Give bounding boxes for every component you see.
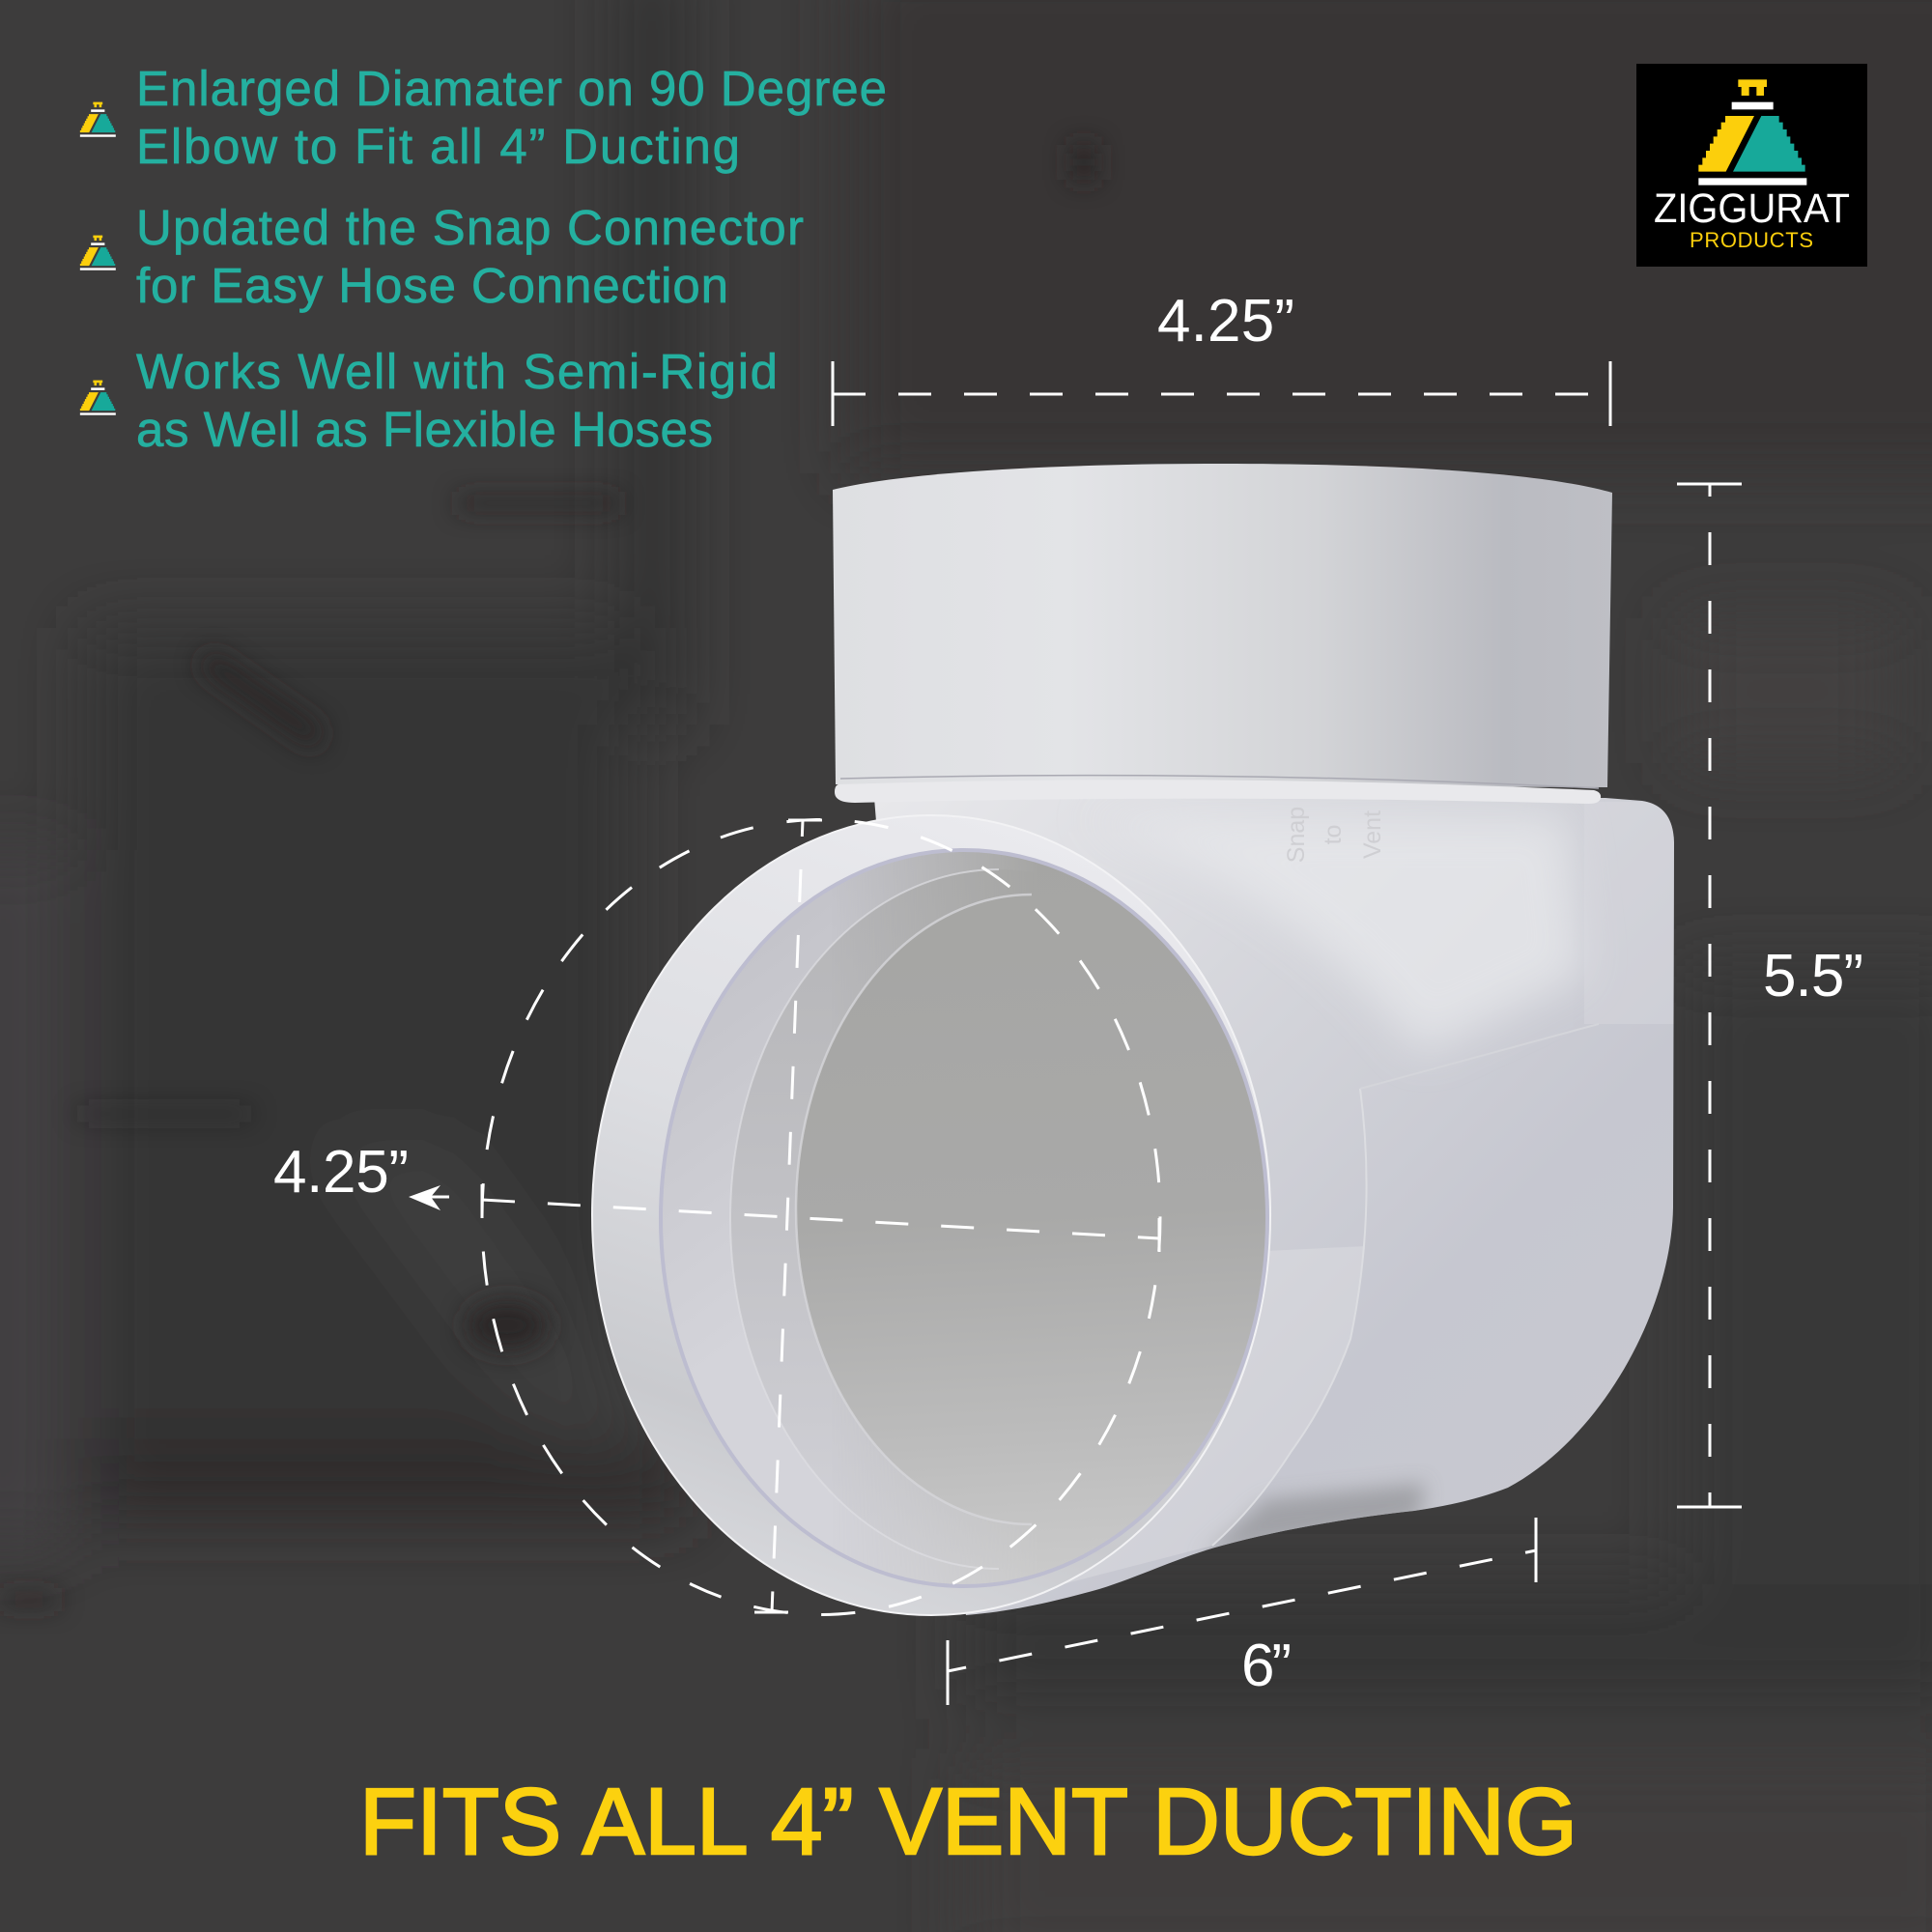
embossed text: Snap to Vent — [1283, 807, 1386, 863]
bullet icon — [80, 236, 116, 270]
inner opening — [796, 895, 1267, 1524]
elbow body — [874, 798, 1674, 1615]
bullet icon — [80, 381, 116, 415]
embossed text: Snap to Vent: Vent — [1359, 810, 1386, 859]
feature 3 text — [136, 344, 778, 457]
feature 1 text — [136, 61, 887, 174]
Ziggurat Products logo — [1636, 64, 1867, 267]
feature 1 — [80, 61, 887, 174]
feature 1 text: Elbow to Fit all 4” Ducting — [136, 119, 740, 174]
arrow pointing to diameter label — [409, 1185, 449, 1210]
feature 3 — [80, 344, 778, 457]
diameter label: 4.25” — [273, 1139, 409, 1206]
feature 3 text: Works Well with Semi-Rigid — [136, 344, 778, 399]
feature 2 text: for Easy Hose Connection — [136, 258, 728, 313]
front rim outer ring — [592, 815, 1270, 1615]
dimension: length 6 — [948, 1518, 1536, 1705]
embossed text: Snap to Vent: to — [1320, 825, 1347, 844]
feature 3 text: as Well as Flexible Hoses — [136, 402, 713, 457]
elbow surface shading — [1063, 802, 1676, 1584]
logo sub-wordmark: PRODUCTS — [1690, 228, 1813, 252]
feature list — [80, 61, 887, 457]
dimension: length 6: 6” — [1241, 1633, 1292, 1699]
collar lip — [835, 780, 1601, 804]
inner opening edge highlight — [796, 895, 1032, 1524]
collar edge — [730, 869, 999, 1569]
logo wordmark: ZIGGURAT — [1654, 185, 1850, 232]
clear insert ring — [661, 850, 1267, 1586]
clear insert edge — [661, 850, 1267, 1586]
top cylinder collar — [833, 464, 1612, 787]
headline: FITS ALL 4” VENT DUCTING — [359, 1769, 1577, 1874]
dimension: height 5.5: 5.5” — [1763, 943, 1863, 1009]
dimension: diameter 4.25 dashed circle — [273, 819, 1160, 1615]
embossed text: Snap to Vent: Snap — [1283, 807, 1310, 863]
feature 2 text — [136, 200, 804, 313]
dimension: top width 4.25: 4.25” — [1157, 288, 1294, 355]
feature 2 — [80, 200, 804, 313]
feature 1 text: Enlarged Diamater on 90 Degree — [136, 61, 887, 116]
feature 2 text: Updated the Snap Connector — [136, 200, 804, 255]
inner collar — [730, 869, 1267, 1569]
product: white 90 degree elbow — [592, 464, 1676, 1615]
inner opening right side fill — [870, 852, 1260, 1584]
logo mark — [1698, 79, 1806, 185]
bullet icon — [80, 102, 116, 137]
